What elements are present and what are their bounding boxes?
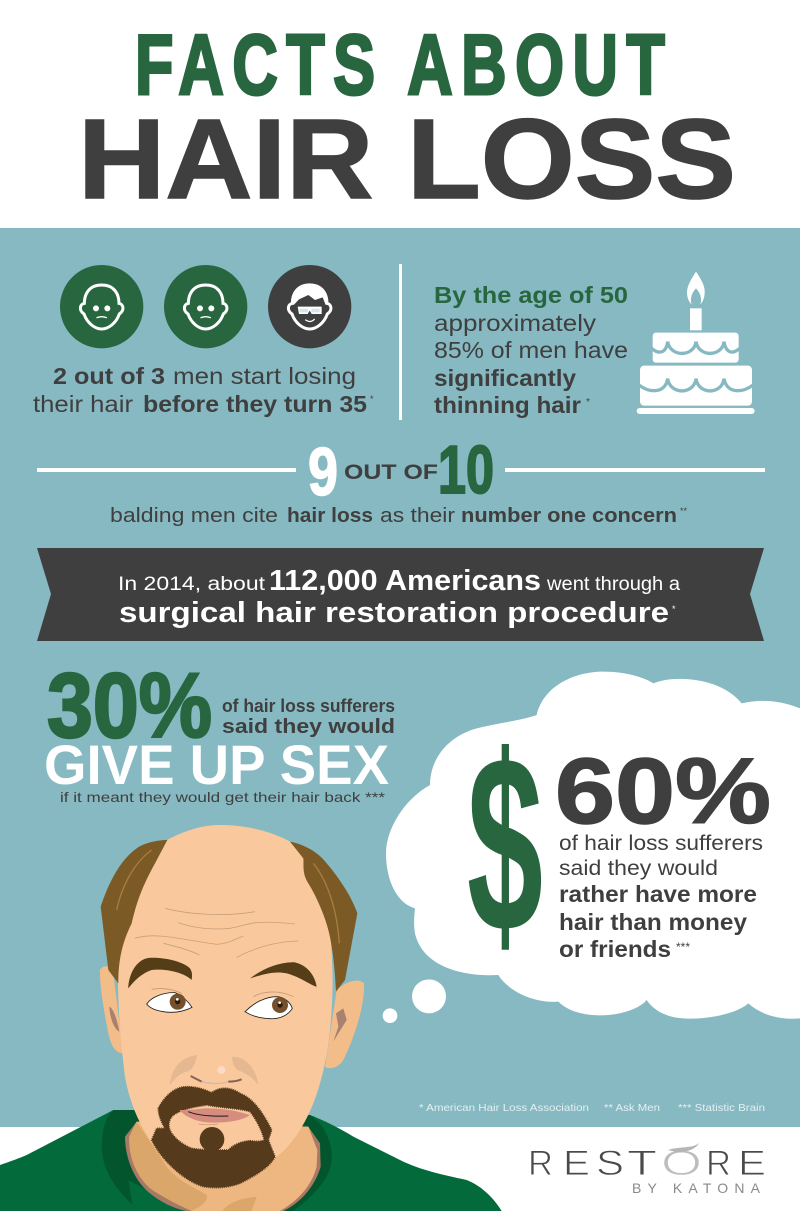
stat: 30 percent: 30% xyxy=(47,655,212,757)
logo: Restore by Katona: O xyxy=(661,1144,702,1183)
banner: surgical procedure xyxy=(37,548,764,641)
stat divider: 9 out of 10: 10 xyxy=(438,432,494,508)
stat: 30 percent: of hair loss sufferers xyxy=(222,696,395,716)
title: FACTS ABOUT xyxy=(135,17,665,112)
thought cloud xyxy=(383,672,800,1023)
stat: 30 percent: if it meant they would get their hair back *** xyxy=(60,789,386,805)
stat: 60 percent: rather have more xyxy=(559,881,757,907)
sources footnote: *** Statistic Brain xyxy=(678,1102,765,1114)
sources footnote: ** Ask Men xyxy=(604,1102,660,1114)
title xyxy=(78,17,736,222)
stat divider: 9 out of 10: OUT OF xyxy=(344,461,438,484)
stat: 2 out of 3 men: their hair xyxy=(33,391,133,417)
logo: Restore by Katona: R xyxy=(706,1144,731,1183)
sources footnote xyxy=(419,1102,765,1114)
stat: by the age of 50: thinning hair xyxy=(434,392,581,418)
stat: 60 percent: hair than money xyxy=(559,909,747,935)
nose xyxy=(170,1055,258,1085)
text: number one concern: ** xyxy=(680,506,688,516)
stat: 2 out of 3 men: men start losing xyxy=(173,363,356,389)
stat: by the age of 50: approximately xyxy=(434,310,597,336)
ear right xyxy=(325,981,364,1068)
stat: by the age of 50 xyxy=(434,282,628,418)
stat: by the age of 50: 85% of men have xyxy=(434,337,628,363)
stat: by the age of 50: By the age of 50 xyxy=(434,282,628,308)
beard and moustache xyxy=(152,1087,275,1188)
logo: Restore by Katona: T xyxy=(627,1144,657,1183)
banner: surgical procedure: 112,000 Americans xyxy=(269,565,541,597)
banner: surgical procedure: * xyxy=(672,604,676,614)
stat: 2 out of 3 men: * xyxy=(370,394,374,404)
stat: 2 out of 3 men: before they turn 35 xyxy=(143,391,367,417)
ear left xyxy=(100,966,123,1053)
mouth xyxy=(179,1108,250,1125)
logo: Restore by Katona: E xyxy=(563,1144,590,1183)
stat: 2 out of 3 men: 2 out of 3 xyxy=(53,363,165,389)
eyebrows xyxy=(128,958,317,988)
stat: 60 percent: 60% xyxy=(555,739,771,843)
stat: 60 percent xyxy=(467,704,771,985)
text: number one concern: as their xyxy=(380,505,455,527)
icons: three men, two balding xyxy=(60,265,351,348)
soul patch xyxy=(200,1127,224,1152)
text: number one concern: balding men cite xyxy=(110,505,278,527)
stat: by the age of 50: * xyxy=(586,397,590,408)
teal background panel xyxy=(0,228,800,1127)
forehead wrinkles xyxy=(135,908,298,957)
logo: Restore by Katona: R xyxy=(528,1144,553,1183)
illustration: balding man xyxy=(0,825,502,1211)
head shape xyxy=(118,825,333,1188)
logo: Restore by Katona: S xyxy=(596,1144,624,1183)
sources footnote: * American Hair Loss Association xyxy=(419,1102,589,1114)
logo: Restore by Katona: E xyxy=(738,1144,766,1183)
shirt xyxy=(0,1110,502,1211)
stat divider: 9 out of 10: 9 xyxy=(308,434,338,510)
text: number one concern: number one concern xyxy=(461,505,677,527)
stat: 60 percent: or friends xyxy=(559,936,671,962)
stat: 30 percent: GIVE UP SEX xyxy=(44,733,389,796)
hair left xyxy=(101,840,167,983)
stat: 2 out of 3 men xyxy=(33,363,374,417)
stat: 60 percent: of hair loss sufferers xyxy=(559,832,763,855)
text: number one concern: hair loss xyxy=(287,505,373,527)
text: number one concern xyxy=(110,505,688,527)
stat: by the age of 50: significantly xyxy=(434,365,576,391)
banner: surgical procedure: In 2014, about xyxy=(118,574,266,595)
stat: 30 percent: said they would xyxy=(222,716,395,738)
banner: surgical procedure: went through a xyxy=(546,574,680,595)
banner: surgical procedure: surgical hair restoration procedure xyxy=(119,597,669,629)
hair right xyxy=(290,842,357,992)
logo: Restore by Katona xyxy=(528,1143,766,1196)
stat: 30 percent xyxy=(44,655,395,805)
eyes xyxy=(147,989,293,1019)
icon: birthday cake xyxy=(637,272,755,414)
head xyxy=(100,825,364,1188)
title: HAIR LOSS xyxy=(78,96,736,222)
stat: 60 percent: *** xyxy=(676,940,690,954)
stat divider: 9 out of 10 xyxy=(37,432,765,510)
stat: 60 percent: said they would xyxy=(559,857,718,880)
logo: Restore by Katona: BY KATONA xyxy=(632,1180,761,1196)
stat: 60 percent: $ xyxy=(467,704,543,985)
